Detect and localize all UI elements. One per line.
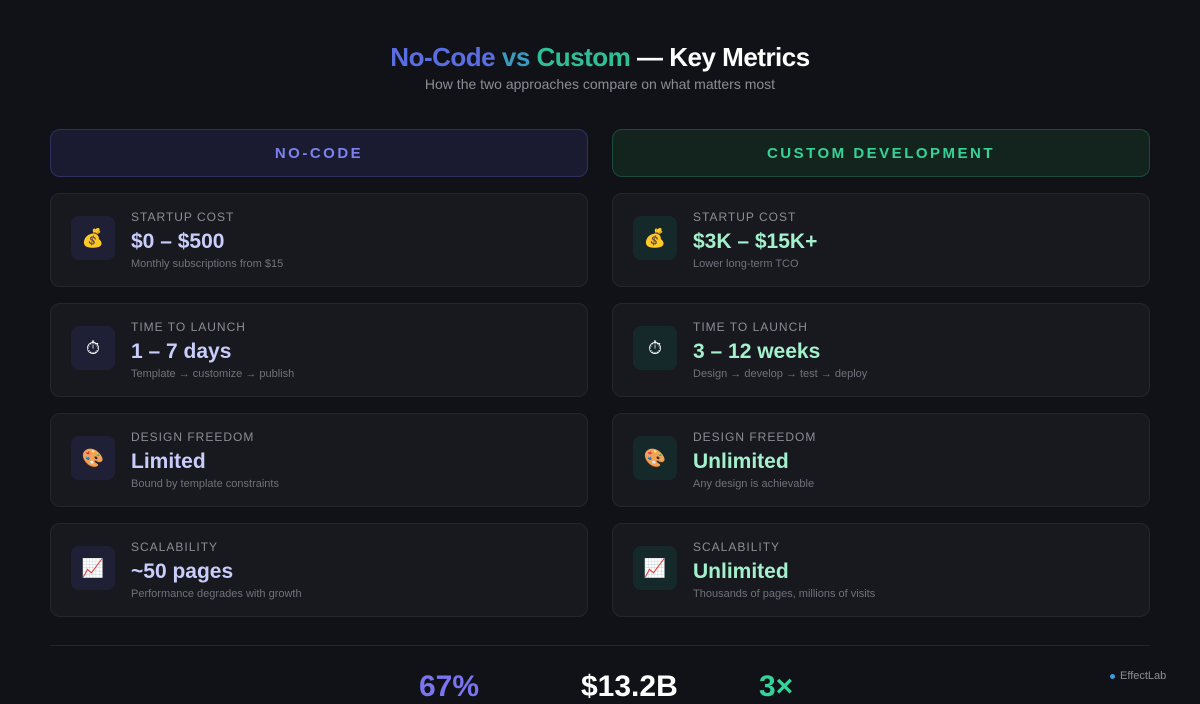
card: custom time: ⏱ [648,338,662,358]
card: no-code design [50,413,588,507]
card: custom time: TIME TO LAUNCH [693,320,808,334]
card: custom startup cost: Lower long-term TCO [693,258,799,270]
card: no-code design: Bound by template constraints [131,478,279,490]
card: no-code time: ⏱ [86,338,100,358]
stat: $13.2B: $13.2B [581,670,678,703]
card: no-code design: DESIGN FREEDOM [131,430,254,444]
stat: 3x: 3× [759,670,793,703]
card: no-code time: Template → customize → publish [131,368,294,380]
card: no-code startup cost: 💰 [82,228,104,248]
card: custom design: Any design is achievable [693,478,814,490]
card: no-code startup cost [50,193,588,287]
card: custom scalability: Thousands of pages, millions of visits [693,588,875,600]
card: no-code scalability: SCALABILITY [131,540,218,554]
card: no-code scalability: ~50 pages [131,560,233,583]
header: no-code [50,129,588,177]
header: custom development: CUSTOM DEVELOPMENT [767,145,995,162]
card: custom design [612,413,1150,507]
card: no-code scalability: Performance degrades with growth [131,588,302,600]
card: no-code startup cost: $0 – $500 [131,230,224,253]
card: custom startup cost: 💰 [644,228,666,248]
card: no-code startup cost: Monthly subscriptions from $15 [131,258,283,270]
card: no-code design: 🎨 [82,448,104,468]
card: custom scalability: SCALABILITY [693,540,780,554]
subtitle: How the two approaches compare on what matters most [425,76,775,92]
card: custom startup cost: STARTUP COST [693,210,796,224]
card: no-code time: TIME TO LAUNCH [131,320,246,334]
card: custom design: 🎨 [644,448,666,468]
card: custom scalability: Unlimited [693,560,789,583]
stat: 67%: 67% [419,670,479,703]
header: no-code: NO-CODE [275,145,363,162]
card: custom time: Design → develop → test → deploy [693,368,867,380]
card: custom time [612,303,1150,397]
header: custom development [612,129,1150,177]
title: No-Code vs Custom — Key Metrics [390,42,810,72]
card: custom startup cost [612,193,1150,287]
brand: EffectLab: EffectLab [1120,670,1166,682]
card: custom design: DESIGN FREEDOM [693,430,816,444]
card: no-code startup cost: STARTUP COST [131,210,234,224]
card: custom startup cost: $3K – $15K+ [693,230,817,253]
card: custom scalability [612,523,1150,617]
card: custom scalability: 📈 [644,558,666,578]
card: no-code scalability: 📈 [82,558,104,578]
card: custom design: Unlimited [693,450,789,473]
card: no-code time: 1 – 7 days [131,340,231,363]
card: custom time: 3 – 12 weeks [693,340,820,363]
card: no-code design: Limited [131,450,206,473]
card: no-code scalability [50,523,588,617]
card: no-code time [50,303,588,397]
